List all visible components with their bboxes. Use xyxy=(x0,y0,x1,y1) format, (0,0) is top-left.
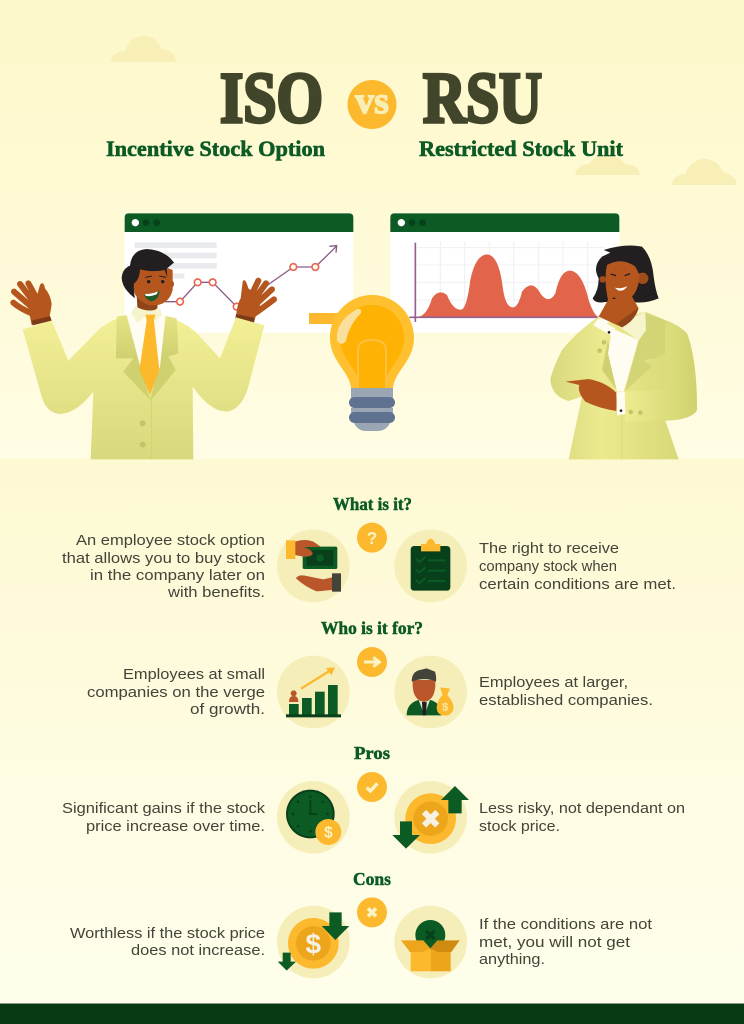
vs badge: vs xyxy=(355,80,389,122)
vs badge xyxy=(348,80,396,129)
woman: sleeve xyxy=(625,324,697,422)
icon: open box xyxy=(394,906,467,978)
heading: What is it?: What is it? xyxy=(333,494,412,514)
title: RSU: RSU xyxy=(423,58,542,138)
woman: jacket xyxy=(550,312,697,459)
woman: hair xyxy=(593,246,659,303)
subtitle: Incentive Stock Option: Incentive Stock Option xyxy=(106,136,325,161)
man: tie xyxy=(139,315,159,395)
text: RSU what is it: company stock when xyxy=(479,558,617,575)
panel: right browser window with area chart xyxy=(390,213,619,333)
icon: hands exchanging cash xyxy=(277,530,350,602)
text: ISO who is it for xyxy=(87,666,265,718)
title: ISO: ISO xyxy=(220,58,323,138)
icon: question badge: ? xyxy=(367,528,377,548)
text: RSU cons: If the conditions are not xyxy=(479,916,653,933)
text: RSU pros: Less risky, not dependant on xyxy=(479,800,685,817)
background upper xyxy=(0,0,744,459)
icons: lower two rows xyxy=(277,772,469,978)
text: ISO pros: price increase over time. xyxy=(86,818,265,835)
icon: falling coin xyxy=(277,906,350,978)
text: ISO cons: does not increase. xyxy=(131,942,265,959)
woman: face and neck xyxy=(599,261,648,327)
icon: clipboard checklist xyxy=(394,530,467,602)
text: ISO what is it: in the company later on xyxy=(90,567,265,584)
icon: growth bars xyxy=(277,656,350,728)
cloud far right xyxy=(672,159,737,185)
woman: upper cuff xyxy=(593,318,615,353)
footer bar xyxy=(0,1004,744,1024)
icon: stable coin with arrows xyxy=(392,781,469,854)
text: ISO who is it for: of growth. xyxy=(190,701,265,718)
man: neck xyxy=(137,295,158,311)
icon: cross badge xyxy=(357,897,387,927)
heading: Pros: Pros xyxy=(354,743,390,763)
text: ISO what is it: with benefits. xyxy=(167,584,265,601)
text: RSU what is it xyxy=(479,540,676,593)
man: head xyxy=(122,249,174,305)
cloud top left xyxy=(111,36,176,62)
woman: shirt and collar xyxy=(608,312,646,392)
man: collar xyxy=(131,306,162,323)
woman: pointing hand xyxy=(565,379,617,411)
icon: falling coin: $ xyxy=(306,928,322,959)
text: RSU cons xyxy=(479,916,653,968)
text: RSU what is it: certain conditions are met. xyxy=(479,576,676,593)
text: RSU pros: stock price. xyxy=(479,818,560,835)
icon: clock and coin: $ xyxy=(324,825,333,842)
text: ISO what is it xyxy=(62,532,266,601)
icon: question badge xyxy=(357,523,387,553)
cloud middle right xyxy=(575,155,640,175)
icon: light bulb xyxy=(309,295,414,431)
illustration: man in yellow suit xyxy=(13,249,274,459)
subtitle: Restricted Stock Unit: Restricted Stock Unit xyxy=(419,136,624,161)
heading: Who is it for?: Who is it for? xyxy=(321,618,423,638)
man: right hand xyxy=(235,280,274,323)
icon: businessman with money bag: $ xyxy=(442,701,449,713)
text: RSU cons: anything. xyxy=(479,951,545,968)
man: left hand xyxy=(13,283,52,325)
man: jacket xyxy=(23,316,264,459)
woman: lapel xyxy=(625,313,665,391)
icon: arrow badge xyxy=(357,647,387,677)
text: ISO who is it for: companies on the verge xyxy=(87,684,265,701)
text: RSU who is it for: Employees at larger, xyxy=(479,674,628,691)
text: RSU pros xyxy=(479,800,685,835)
text: RSU what is it: The right to receive xyxy=(479,540,619,557)
text: RSU who is it for: established companies. xyxy=(479,692,653,709)
icon: clock and coin xyxy=(277,781,350,854)
heading: Cons: Cons xyxy=(353,869,391,889)
text: RSU who is it for xyxy=(479,674,653,709)
man: shirt xyxy=(127,315,166,395)
text: ISO what is it: that allows you to buy stock xyxy=(62,550,266,567)
illustration: woman in yellow suit xyxy=(550,246,697,459)
text: RSU cons: met, you will not get xyxy=(479,934,631,951)
text: ISO pros xyxy=(62,800,266,835)
text: ISO who is it for: Employees at small xyxy=(123,666,265,683)
panel: left browser window with line chart xyxy=(125,213,353,333)
icon: businessman with money bag xyxy=(394,656,467,728)
woman: lower cuff xyxy=(616,392,643,415)
text: ISO cons: Worthless if the stock price xyxy=(70,925,265,942)
text: ISO pros: Significant gains if the stock xyxy=(62,800,266,817)
icon: check badge xyxy=(357,772,387,802)
man: lapels xyxy=(116,315,178,402)
text: ISO cons xyxy=(70,925,265,959)
icons: upper two rows xyxy=(277,523,467,728)
background lower xyxy=(0,459,744,1005)
text: ISO what is it: An employee stock option xyxy=(76,532,265,549)
